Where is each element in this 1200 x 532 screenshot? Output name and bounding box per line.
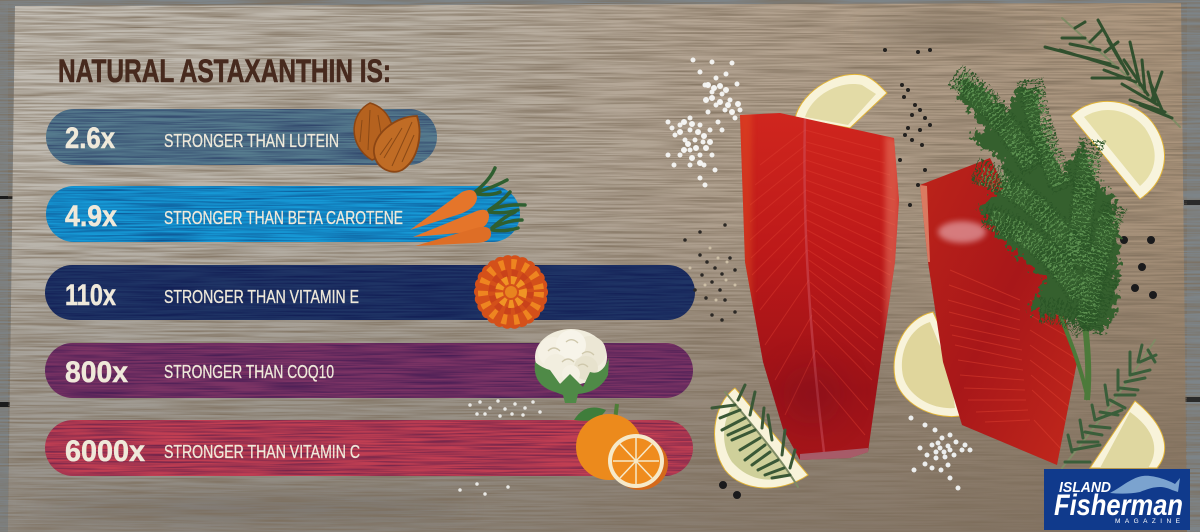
logo: Island Fisherman Magazine [1044,469,1190,530]
bar: CoQ10 [45,343,693,398]
bar: vitamin C [45,420,693,476]
value: 800x: 800x [65,356,128,389]
bar: lutein [46,109,437,165]
label: vitamin C: STRONGER THAN VITAMIN C [164,441,360,462]
flesh chevron lines right [948,270,1078,450]
salt pile upper [668,60,740,185]
value: 110x: 110x [65,279,116,312]
value: 2.6x: 2.6x [65,122,115,155]
dill feathery fronds dark [955,75,1115,330]
pill bars [40,100,700,480]
rosemary lower left [712,385,798,487]
black pepper scatter [685,50,1153,495]
stat values and labels [65,122,403,468]
salmon fillet right [920,158,1078,465]
lemon slice centre [894,312,960,417]
lemon wedge lower left [715,388,808,488]
dill sprig [955,75,1120,400]
icon: carrots [410,168,525,246]
rosemary lower right [1062,340,1156,468]
bar wood grain overlay [40,100,700,480]
dill feathery fronds light [958,80,1112,325]
label: vitamin E: STRONGER THAN VITAMIN E [164,286,359,307]
value: 6000x: 6000x [65,435,145,468]
lemon wedge lower right [1090,401,1165,468]
icon: cauliflower [535,329,609,403]
label: beta carotene: STRONGER THAN BETA CAROTENE [164,207,403,228]
logo word: Island: ISLAND [1059,479,1111,496]
label: CoQ10: STRONGER THAN COQ10 [164,361,334,382]
flesh chevron lines left [750,130,895,435]
salt pile lower [911,418,970,488]
icon: oranges [574,404,668,490]
bar: beta carotene [46,186,520,242]
logo fish [1110,476,1180,494]
value: 4.9x: 4.9x [65,200,117,233]
salmon fillet left [738,110,900,462]
lemon wedge top [795,74,887,128]
lemon wedge right [1071,101,1164,199]
rosemary top right [1045,18,1180,127]
logo word: Magazine: MAGAZINE [1115,518,1181,525]
scattered salt near vitamin C bar [460,401,540,494]
title: NATURAL ASTAXANTHIN IS: [58,53,391,89]
icon: marigold flower [480,261,542,323]
label: lutein: STRONGER THAN LUTEIN [164,130,339,151]
icon: almonds [354,103,419,172]
bar: vitamin E [45,265,695,320]
